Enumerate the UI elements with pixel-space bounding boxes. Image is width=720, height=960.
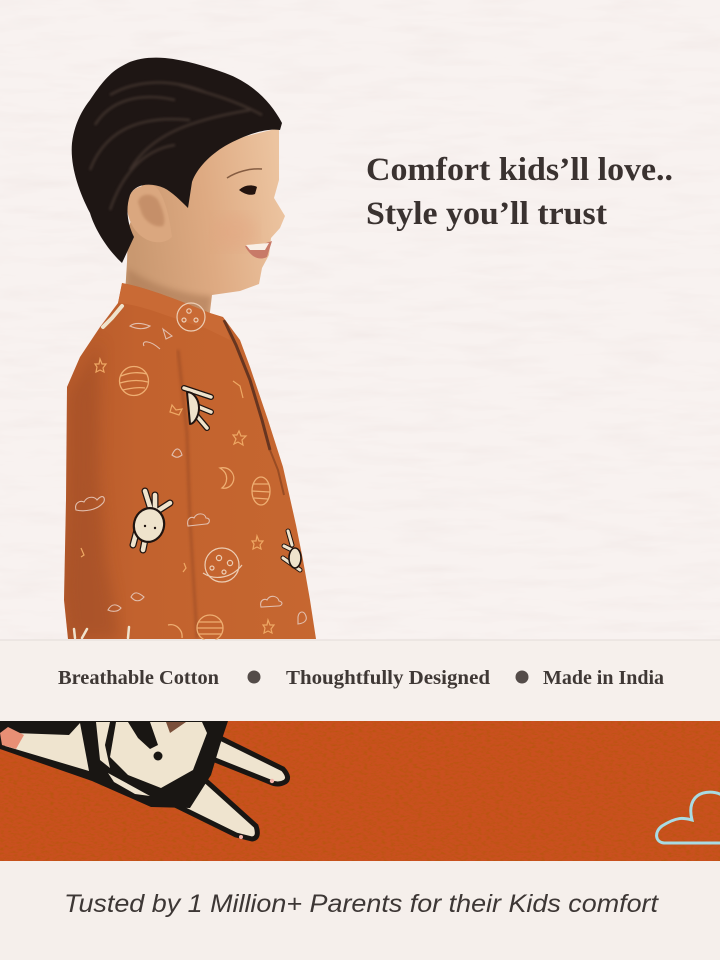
trust tagline: Tusted by 1 Million+ Parents for their Kids comfort [64,890,659,918]
shirt [60,280,320,640]
shirt print: planets [120,366,270,641]
boy's mouth [245,241,272,259]
feature strip [0,640,720,721]
rabbit body [0,721,228,808]
collar [118,283,212,314]
boy's ear [127,185,172,242]
shirt print: rabbit astronauts [74,306,301,638]
bullet dot [516,670,528,684]
feature: made in india: Made in India [543,667,664,689]
heading: Comfort kids’ll love.. [366,152,673,188]
heading [366,152,673,232]
rabbit print close-up [0,721,288,839]
boy's face and neck [126,130,285,313]
cheek blush [213,214,257,250]
rabbit parts at hem [74,627,129,638]
boy's hair [72,58,282,263]
placket line [224,320,270,450]
feature: breathable cotton: Breathable Cotton [58,667,219,689]
cloud print close-up [657,792,720,843]
fabric close-up band [0,721,720,861]
bullet dot [248,670,260,684]
footer strip [0,861,720,960]
photo: smiling boy in profile [60,58,320,641]
boy's eye [239,185,257,195]
rabbit near hem [283,531,301,570]
sleeve fold shading [64,340,120,638]
rabbit at shoulder [103,306,122,327]
jaw shadow [126,270,212,313]
shirt print: stars [81,359,274,633]
heading: Style you’ll trust [366,196,607,232]
rabbit on sleeve [130,491,170,550]
feature: thoughtfully designed: Thoughtfully Designed [286,667,490,689]
rabbit lower leg [175,780,257,839]
boy's eyebrow [227,169,262,178]
rabbit on chest [184,388,211,428]
shirt print: cratered planets [177,303,242,582]
shirt print: clouds [76,323,306,624]
rabbit upper leg [210,733,288,784]
